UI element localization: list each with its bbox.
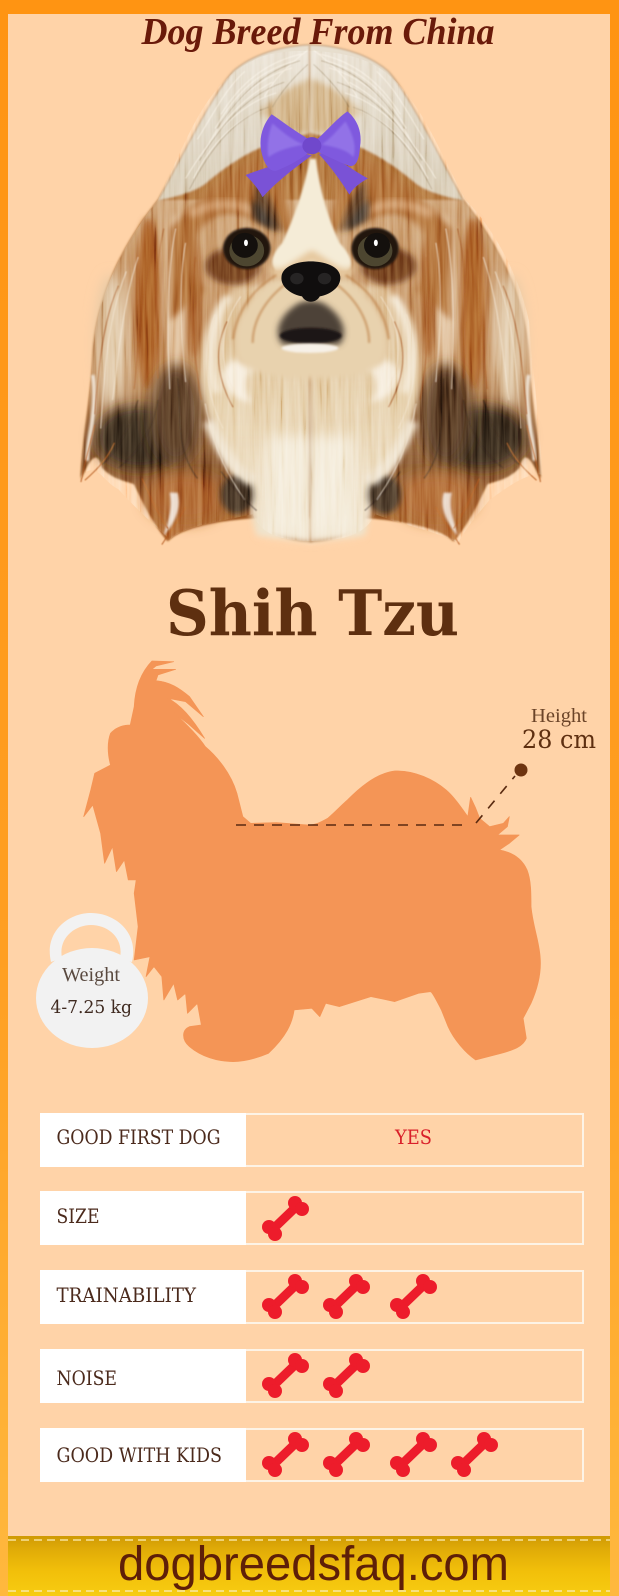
left eye — [223, 228, 270, 269]
forehead stripe — [272, 159, 351, 271]
row: size: SIZE — [56, 1204, 100, 1228]
title: Dog Breed From China — [141, 11, 494, 53]
row: size — [40, 1191, 583, 1245]
icon: weight kettlebell with label: Weight — [62, 964, 120, 986]
row: good with kids: GOOD WITH KIDS — [56, 1443, 222, 1467]
row: trainability: TRAINABILITY — [56, 1283, 197, 1307]
row: trainability — [40, 1270, 583, 1324]
row: good with kids — [40, 1428, 583, 1482]
height label — [522, 705, 596, 754]
footer banner: dogbreedsfaq.com — [118, 1538, 509, 1591]
row: good first dog — [40, 1113, 583, 1167]
illustration: Shih Tzu face portrait — [79, 43, 542, 546]
icon: purple bow — [246, 111, 368, 197]
lower lip — [281, 344, 338, 353]
row: noise: NOISE — [56, 1366, 117, 1390]
muzzle fur — [233, 279, 388, 379]
height marker — [236, 764, 528, 825]
dog silhouette — [84, 661, 540, 1062]
height label: Height — [531, 705, 587, 727]
height label: 28 cm — [522, 725, 596, 754]
row: good first dog: GOOD FIRST DOG — [56, 1125, 220, 1149]
icon: weight kettlebell with label — [36, 913, 148, 1048]
footer banner — [8, 1536, 610, 1596]
eye surrounds — [268, 250, 355, 279]
right eye — [351, 228, 399, 269]
row: good first dog: YES — [394, 1125, 432, 1149]
heading: breed name: Shih Tzu — [166, 576, 459, 650]
row: noise — [40, 1349, 583, 1403]
icon: weight kettlebell with label: 4-7.25 kg — [50, 997, 132, 1018]
nose — [281, 261, 340, 302]
